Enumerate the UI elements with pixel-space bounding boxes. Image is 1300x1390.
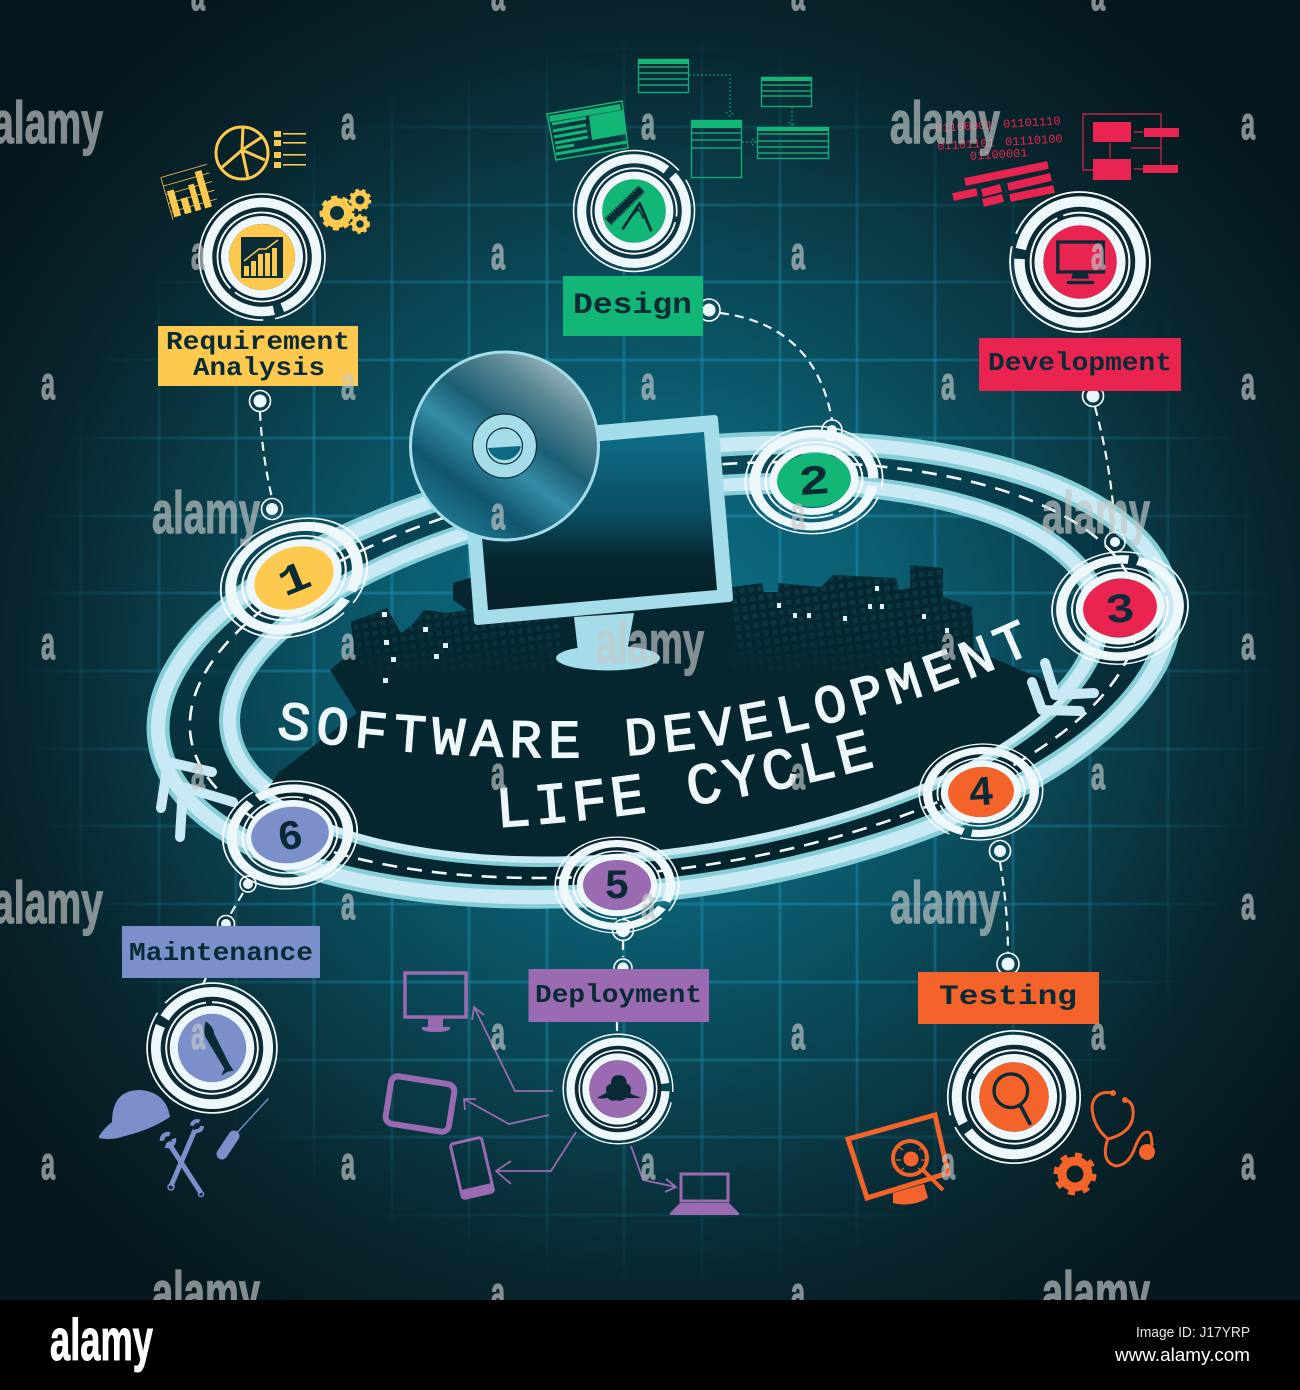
label: design: Design xyxy=(573,289,692,323)
node 1 xyxy=(165,464,423,692)
node 2 xyxy=(730,413,898,547)
watermarks: a xyxy=(1241,1137,1255,1189)
title line 1: SOFTWARE DEVELOPMENT xyxy=(278,619,1022,758)
icon: design card xyxy=(547,101,628,160)
icon: cloud xyxy=(597,1075,641,1101)
watermarks: a xyxy=(341,357,355,409)
binary code text: 01100001 xyxy=(935,118,993,136)
label: requirement analysis: Analysis xyxy=(193,353,325,383)
binary code text xyxy=(935,114,1064,166)
binary code text: 01110100 xyxy=(1005,132,1063,150)
icon: screwdriver xyxy=(222,1099,268,1154)
node 2: 2 xyxy=(797,458,832,508)
node 6 xyxy=(189,750,391,920)
label: testing: Testing xyxy=(939,982,1077,1013)
watermarks: a xyxy=(791,487,805,539)
icon: gears xyxy=(322,190,370,233)
title xyxy=(278,619,1022,828)
node 1: 1 xyxy=(272,553,319,609)
label: requirement analysis: Requirement xyxy=(166,327,350,357)
icon: desktop monitor xyxy=(1058,242,1103,284)
flow chart xyxy=(1083,114,1179,180)
icon: legend list xyxy=(274,131,306,168)
schema connectors xyxy=(689,75,795,145)
node 4: 4 xyxy=(967,769,995,819)
node 3 xyxy=(1026,527,1214,689)
process circle: maintenance xyxy=(123,959,301,1137)
icon group: design diagrams xyxy=(547,59,829,178)
node 6: 6 xyxy=(275,812,306,863)
watermarks: a xyxy=(1241,617,1255,669)
label: design xyxy=(563,276,703,336)
watermarks: a xyxy=(791,1007,805,1059)
process circle: deployment xyxy=(563,1034,673,1144)
direction arrow: left xyxy=(161,762,233,837)
icon group: testing tools xyxy=(848,1090,1155,1205)
icon: pie chart xyxy=(216,127,268,179)
icon: phone target xyxy=(450,1137,494,1199)
label: maintenance: Maintenance xyxy=(129,938,313,968)
icon group: maintenance tools xyxy=(99,1090,268,1196)
icon: schema tables xyxy=(638,60,828,178)
watermarks: a xyxy=(1091,747,1105,799)
monitor frame and screen xyxy=(460,415,733,625)
icon: laptop target xyxy=(670,1174,739,1215)
watermarks: a xyxy=(41,1137,55,1189)
label: deployment: Deployment xyxy=(535,980,702,1010)
label: development: Development xyxy=(988,348,1172,378)
icon: tablet target xyxy=(385,1075,455,1133)
watermarks: alamy xyxy=(596,610,704,676)
direction arrow: right xyxy=(1032,663,1094,711)
icon: ruler and compass xyxy=(608,189,651,231)
title line 2: LIFE CYCLE xyxy=(500,729,874,828)
icon: growth chart xyxy=(241,237,283,278)
watermarks: a xyxy=(41,357,55,409)
watermarks: a xyxy=(491,1267,505,1319)
deployment arrows xyxy=(464,1007,676,1192)
icon: gear xyxy=(1056,1155,1094,1193)
watermarks: alamy xyxy=(152,480,260,546)
icon: crossed wrench and tool xyxy=(162,1121,204,1196)
city skyline platform xyxy=(268,565,1060,856)
process circle: testing xyxy=(924,1007,1104,1187)
watermarks: alamy xyxy=(152,1260,260,1326)
label: development xyxy=(979,338,1181,391)
icon: tilted bar chart xyxy=(161,164,219,220)
watermarks: a xyxy=(641,1137,655,1189)
icon: stethoscope xyxy=(1092,1090,1155,1166)
footer logo: alamy xyxy=(50,1308,153,1373)
connector dots xyxy=(218,299,1125,977)
watermarks: a xyxy=(941,617,955,669)
icon: helmet xyxy=(99,1090,170,1139)
watermarks: alamy xyxy=(890,90,1000,156)
watermarks: a xyxy=(791,1267,805,1319)
watermarks: a xyxy=(341,97,355,149)
process circle: development xyxy=(999,181,1161,343)
label: maintenance xyxy=(122,926,320,978)
icon: monitor target xyxy=(405,973,466,1032)
icon: wrench xyxy=(204,1021,234,1076)
watermarks: alamy xyxy=(1042,1260,1150,1326)
icon: magnifier xyxy=(994,1074,1030,1123)
watermarks: a xyxy=(341,1137,355,1189)
monitor stand xyxy=(574,613,634,652)
image id: Image ID: J17YRP xyxy=(1136,1324,1250,1341)
watermarks: a xyxy=(191,747,205,799)
node 4 xyxy=(898,725,1064,859)
process circle: requirement analysis xyxy=(185,180,339,334)
watermarks: a xyxy=(1241,357,1255,409)
watermarks: a xyxy=(191,1007,205,1059)
watermarks: a xyxy=(1241,877,1255,929)
binary code text: 01100001 xyxy=(970,146,1028,164)
watermarks: a xyxy=(641,877,655,929)
watermarks: a xyxy=(491,227,505,279)
icon group: requirement analysis xyxy=(161,127,370,233)
connector dashed lines xyxy=(203,313,1115,1035)
label: deployment xyxy=(528,969,709,1022)
watermarks: a xyxy=(341,877,355,929)
watermarks: a xyxy=(641,357,655,409)
watermarks: a xyxy=(191,227,205,279)
icon: bug on monitor xyxy=(848,1115,948,1205)
watermarks: a xyxy=(491,747,505,799)
watermarks: alamy xyxy=(890,870,1000,936)
watermarks: a xyxy=(491,1007,505,1059)
table headers xyxy=(638,59,829,131)
code bars xyxy=(953,165,1054,203)
icon group: development xyxy=(935,114,1179,203)
label: requirement analysis xyxy=(158,326,358,386)
cycle ring road xyxy=(129,383,1199,957)
watermarks: a xyxy=(1091,227,1105,279)
website: www.alamy.com xyxy=(1114,1345,1250,1365)
watermarks: a xyxy=(41,617,55,669)
optical disc xyxy=(410,352,598,540)
watermarks: a xyxy=(1091,1007,1105,1059)
footer bar xyxy=(0,1300,1300,1390)
watermarks: a xyxy=(941,357,955,409)
watermarks: alamy xyxy=(1042,480,1150,546)
monitor xyxy=(460,415,733,670)
node 5 xyxy=(533,820,701,950)
watermarks: a xyxy=(941,1137,955,1189)
watermarks: a xyxy=(641,97,655,149)
label: testing xyxy=(918,972,1099,1024)
watermarks: a xyxy=(791,747,805,799)
watermarks: a xyxy=(341,617,355,669)
watermarks: a xyxy=(791,227,805,279)
node 3: 3 xyxy=(1103,585,1137,636)
watermarks: a xyxy=(491,487,505,539)
binary code text: 01101101 xyxy=(937,136,995,154)
binary code text: 01101110 xyxy=(1003,114,1061,132)
watermarks: a xyxy=(1241,97,1255,149)
node 5: 5 xyxy=(604,863,630,911)
icon group: deployment targets xyxy=(385,973,739,1215)
process circle: design xyxy=(548,125,720,297)
